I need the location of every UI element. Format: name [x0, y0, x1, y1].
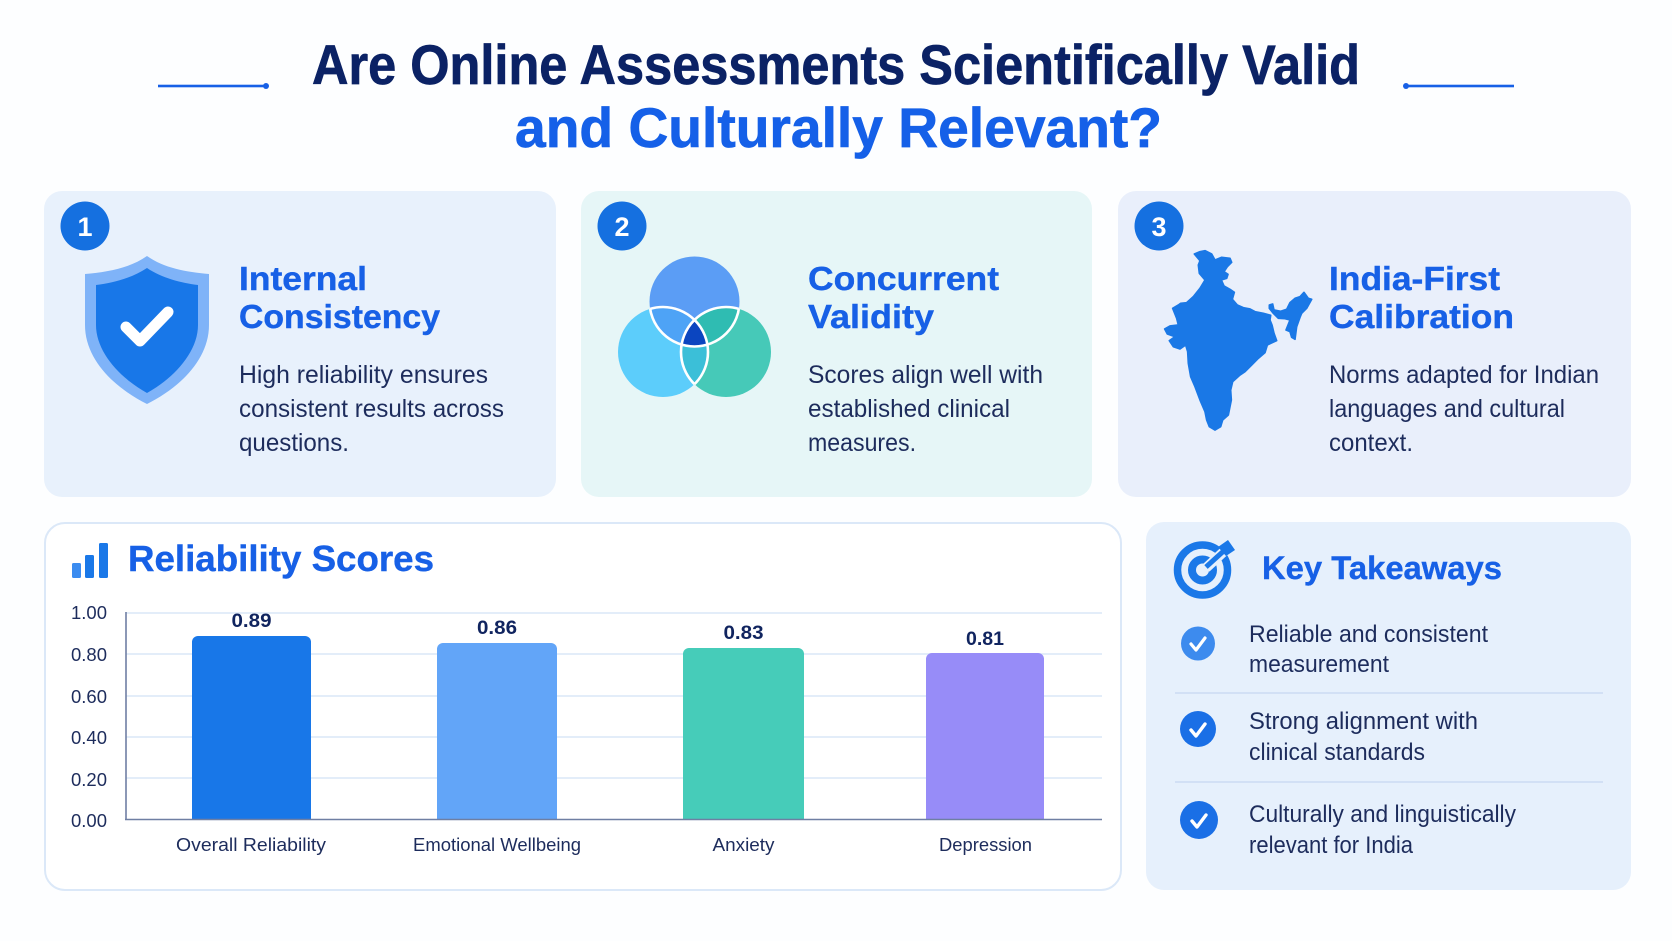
panel: key takeaways: [1146, 522, 1631, 890]
card text: measures.: [808, 429, 916, 457]
card text: Scores align well with: [808, 361, 1043, 389]
takeaway 2: [1180, 708, 1478, 766]
bar: emotional wellbeing: Emotional Wellbeing: [413, 834, 581, 855]
title: and Culturally Relevant?: [515, 96, 1162, 159]
axis labels: [71, 602, 107, 831]
card text: languages and cultural: [1329, 395, 1565, 423]
card heading: Consistency: [239, 298, 441, 335]
axis labels: 0.80: [71, 644, 107, 665]
takeaway 1: [1181, 621, 1488, 678]
panel: concurrent validity: [581, 191, 1092, 497]
axis labels: 0.20: [71, 769, 107, 790]
bar: anxiety: Anxiety: [712, 834, 775, 855]
card heading: Internal: [239, 260, 367, 297]
card heading: Calibration: [1329, 298, 1514, 335]
card text: questions.: [239, 429, 349, 457]
axis labels: 0.40: [71, 727, 107, 748]
badge 3: [1134, 202, 1184, 250]
card heading: [239, 260, 441, 335]
takeaway 2: clinical standards: [1249, 739, 1425, 766]
takeaway 2: Strong alignment with: [1249, 708, 1478, 735]
bar: depression: 0.81: [966, 628, 1004, 650]
icon: map of India: [1165, 251, 1312, 430]
title: Are Online Assessments Scientifically Valid: [312, 33, 1360, 96]
card text: [1329, 361, 1599, 457]
card text: established clinical: [808, 395, 1010, 423]
heading: Key Takeaways: [1262, 550, 1502, 586]
axis labels: 0.00: [71, 810, 107, 831]
card text: High reliability ensures: [239, 361, 488, 389]
panel: reliability scores: [45, 523, 1121, 890]
bar: depression: Depression: [939, 834, 1032, 855]
bar chart: [71, 602, 1102, 855]
bar: anxiety: 0.83: [724, 622, 764, 644]
bar: overall reliability: [176, 610, 327, 855]
axis labels: 1.00: [71, 602, 107, 623]
bar: anxiety: [683, 622, 804, 855]
bar: emotional wellbeing: 0.86: [477, 617, 517, 639]
takeaway 1: measurement: [1249, 651, 1389, 678]
icon: target with arrow: [1178, 540, 1235, 595]
icon: bar chart: [72, 543, 108, 578]
badge 2: 2: [614, 212, 630, 242]
card heading: Concurrent: [808, 260, 999, 297]
icon: shield with check: [85, 256, 209, 404]
takeaway 3: relevant for India: [1249, 832, 1414, 859]
bar: depression: [926, 628, 1044, 855]
axis labels: 0.60: [71, 686, 107, 707]
bar: overall reliability: 0.89: [232, 610, 272, 632]
title: [158, 33, 1514, 159]
panel: internal consistency: [44, 191, 556, 497]
takeaway 3: [1180, 801, 1516, 859]
takeaway 3: Culturally and linguistically: [1249, 801, 1516, 828]
icon: venn diagram: [618, 256, 771, 397]
badge 1: [60, 202, 110, 250]
card heading: India-First: [1329, 260, 1500, 297]
heading: Reliability Scores: [128, 538, 434, 579]
card heading: Validity: [808, 298, 935, 335]
card text: context.: [1329, 429, 1413, 457]
badge 2: [598, 202, 646, 250]
card text: [239, 361, 504, 457]
badge 3: 3: [1151, 212, 1167, 242]
card heading: [808, 260, 999, 335]
card text: consistent results across: [239, 395, 504, 423]
card heading: [1329, 260, 1514, 335]
card text: Norms adapted for Indian: [1329, 361, 1599, 389]
badge 1: 1: [77, 212, 93, 242]
takeaway 1: Reliable and consistent: [1249, 621, 1488, 648]
bar: overall reliability: Overall Reliability: [176, 834, 327, 855]
panel: india-first calibration: [1118, 191, 1631, 497]
bar: emotional wellbeing: [413, 617, 581, 855]
card text: [808, 361, 1043, 457]
